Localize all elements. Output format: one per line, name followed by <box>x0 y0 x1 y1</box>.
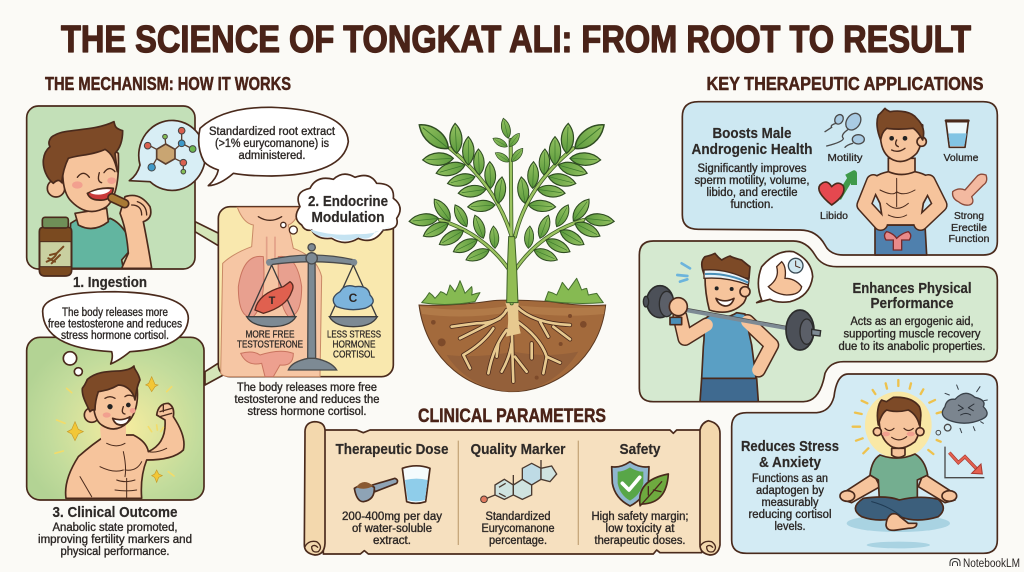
heading: the mechanism: THE MECHANISM: HOW IT WORKS <box>45 74 291 94</box>
label: more free testosterone: MORE FREE <box>246 328 294 340</box>
icon: erectile function <box>953 174 987 205</box>
panel: endocrine modulation <box>195 174 400 418</box>
icon: supplement bottle <box>39 217 72 276</box>
scroll right roll <box>700 421 720 555</box>
column: safety: low toxicity at <box>606 523 675 535</box>
illustration: meditating man <box>840 380 957 548</box>
body: clinical outcome: Anabolic state promoted, <box>52 522 178 534</box>
label: less stress hormone cortisol: CORTISOL <box>333 348 375 360</box>
caption: endocrine modulation: The body releases more free <box>237 382 377 394</box>
label: libido: Libido <box>820 210 848 222</box>
column: therapeutic dose: extract. <box>373 535 411 547</box>
callout text: release: free testosterone and reduces <box>48 318 182 330</box>
icon: molecule bubble <box>129 120 205 190</box>
caption: endocrine modulation: testosterone and reduces the <box>234 394 380 406</box>
icon: sparkles <box>67 377 162 482</box>
illustration: weightlifter <box>643 253 821 402</box>
icon: steroid molecule <box>481 460 557 503</box>
body: physical performance <box>838 316 986 353</box>
column: therapeutic dose: Therapeutic Dose <box>336 441 448 458</box>
illustration: man <box>864 108 940 255</box>
panel: clinical outcome <box>27 292 204 558</box>
column: quality marker: percentage. <box>489 535 547 547</box>
column: quality marker: Eurycomanone <box>482 523 554 535</box>
label: strong erectile function: Function <box>948 233 990 245</box>
thought dot small <box>74 368 82 376</box>
scroll body <box>323 430 702 554</box>
heading: 2. Endocrine Modulation: 2. Endocrine <box>308 193 388 210</box>
callout text: extract: (>1% eurycomanone) is <box>215 138 329 150</box>
body: androgenic health: function. <box>730 199 774 211</box>
body: reduces stress: measurably <box>762 497 819 509</box>
heading: enhances physical performance <box>852 280 972 312</box>
body: reduces stress: reducing cortisol <box>748 509 832 521</box>
body: clinical outcome: physical performance. <box>60 546 170 558</box>
arm right <box>921 182 940 223</box>
panel: reduces stress and anxiety <box>732 374 997 553</box>
icon: scoop and glass <box>354 466 430 503</box>
body: androgenic health: Significantly improves <box>698 163 807 175</box>
icon: balance scale <box>247 244 377 370</box>
body: physical performance: Acts as an ergogenic aid, <box>850 316 974 328</box>
label: strong erectile function <box>948 210 990 245</box>
heading: enhances physical performance: Performance <box>870 295 954 312</box>
caption: endocrine modulation: stress hormone cortisol. <box>248 406 366 418</box>
icon: muscle and clock bubble <box>757 251 813 303</box>
column: safety: Safety <box>620 441 661 458</box>
soil <box>419 300 606 392</box>
label: volume: Volume <box>944 152 979 164</box>
panel: clinical parameters scroll <box>304 421 720 555</box>
column: quality marker: Standardized <box>486 511 550 523</box>
stems <box>440 140 583 303</box>
callout text: extract: administered. <box>238 150 306 162</box>
illustration: man taking capsule <box>43 122 152 268</box>
column: safety <box>592 441 688 547</box>
heading: enhances physical performance: Enhances Physical <box>852 280 972 297</box>
label: less stress hormone cortisol: HORMONE <box>332 338 376 350</box>
label: strong erectile function: Strong <box>954 210 984 222</box>
column: safety: High safety margin; <box>592 511 688 523</box>
column: quality marker: Quality Marker <box>470 441 566 458</box>
heading: 3. Clinical Outcome: 3. Clinical Outcome <box>52 504 178 521</box>
body: androgenic health <box>694 163 810 211</box>
body: androgenic health: sperm motility, volume, <box>694 175 810 187</box>
heading: clinical parameters: CLINICAL PARAMETERS <box>418 406 606 427</box>
heading: reduces stress and anxiety: Reduces Stress <box>741 438 839 455</box>
body: androgenic health: libido, and erectile <box>706 187 798 199</box>
icon: shield and leaf <box>612 462 668 506</box>
panel: enhances physical performance <box>639 241 997 402</box>
heading: boosts male androgenic health <box>692 125 812 158</box>
heading: 1. Ingestion: 1. Ingestion <box>73 274 147 291</box>
body: clinical outcome: improving fertility markers and <box>38 534 192 546</box>
callout text: release: stress hormone cortisol. <box>61 330 169 342</box>
body: physical performance: due to its anabolic properties. <box>838 341 986 353</box>
column: therapeutic dose: of water-soluble <box>352 523 432 535</box>
body: clinical outcome <box>38 522 192 558</box>
column: quality marker <box>470 441 566 547</box>
leaves <box>409 119 507 265</box>
speech bubble <box>199 107 348 186</box>
label: strong erectile function: Erectile <box>951 222 987 234</box>
illustration: tongkat ali plant <box>409 117 615 392</box>
column: therapeutic dose: 200-400mg per day <box>342 511 442 523</box>
callout text: extract <box>209 126 336 162</box>
callout text: release: The body releases more <box>62 307 168 319</box>
arm left <box>864 182 881 223</box>
caption: endocrine modulation <box>234 382 380 418</box>
body: reduces stress: adaptogen by <box>756 485 824 497</box>
body: reduces stress <box>748 473 832 533</box>
callout text: release <box>48 307 182 342</box>
icon: sperm motility <box>825 110 864 147</box>
heading: 2. Endocrine Modulation: Modulation <box>312 209 384 226</box>
scroll left roll <box>304 422 325 555</box>
grass tufts <box>422 278 603 304</box>
body: physical performance: supporting muscle recovery <box>844 328 981 340</box>
label: more free testosterone: TESTOSTERONE <box>237 338 303 350</box>
panel: boosts male androgenic health <box>682 102 997 255</box>
roots <box>452 303 570 382</box>
icon: declining stress chart <box>945 447 984 478</box>
panel: ingestion <box>27 106 348 291</box>
icon: cloud C <box>333 286 373 310</box>
label: C: C <box>349 291 358 305</box>
thought cloud <box>296 174 400 242</box>
icon: volume cup <box>946 121 968 147</box>
body: reduces stress: Functions as an <box>752 473 828 485</box>
torso illustration <box>221 207 322 377</box>
column: therapeutic dose <box>336 441 448 547</box>
body: reduces stress: levels. <box>774 521 806 533</box>
icon: heart with arrow <box>819 173 854 205</box>
speech bubble <box>43 292 188 364</box>
heading: reduces stress and anxiety: & Anxiety <box>759 454 822 471</box>
heading: 2. Endocrine Modulation <box>308 193 388 226</box>
label: motility: Motility <box>828 152 863 164</box>
heading: reduces stress and anxiety <box>741 438 839 471</box>
heading: boosts male androgenic health: Boosts Male <box>712 125 792 142</box>
label: less stress hormone cortisol: LESS STRESS <box>327 328 381 340</box>
illustration: flexing man <box>66 366 184 498</box>
heading: key therapeutic applications: KEY THERAPEUTIC APPLICATIONS <box>706 74 984 94</box>
connector wedges between steps <box>195 222 223 385</box>
callout text: extract: Standardized root extract <box>209 126 336 138</box>
label: T: T <box>269 295 276 307</box>
thought dots <box>63 352 77 365</box>
icon: reproductive organ <box>884 232 911 250</box>
column: safety: therapeutic doses. <box>594 535 686 547</box>
icon: storm cloud <box>936 385 987 435</box>
label: less stress hormone cortisol <box>327 328 381 360</box>
heading: boosts male androgenic health: Androgenic Health <box>692 141 812 158</box>
label: more free testosterone <box>237 328 303 350</box>
icon: muscle T <box>255 282 293 313</box>
